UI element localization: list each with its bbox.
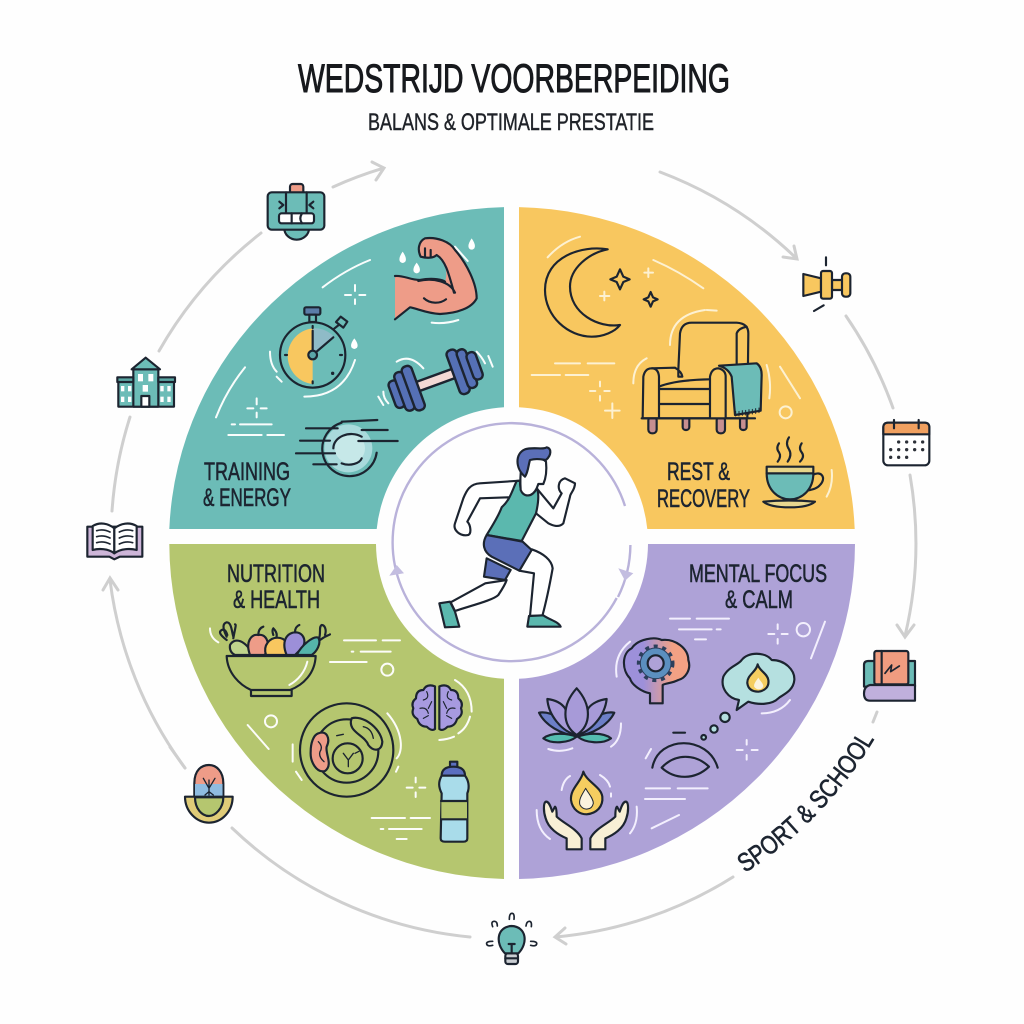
icon: stars xyxy=(610,269,658,307)
icon: healthy bowl xyxy=(185,765,233,823)
title: WEDSTRIJD VOORBERPEIDING xyxy=(298,57,730,101)
panel: rest and recovery xyxy=(519,207,855,529)
heading: nutrition xyxy=(227,560,325,614)
icon: megaphone weight xyxy=(803,257,850,311)
icon: speed ball xyxy=(296,420,398,476)
heading: training: & ENERGY xyxy=(203,484,291,512)
icon: head with gear xyxy=(624,638,689,703)
icon: light bulb xyxy=(487,913,537,964)
icon: crescent moon xyxy=(545,248,620,337)
icon: lotus flower xyxy=(539,688,614,742)
icon: dumbbell xyxy=(384,342,487,418)
icon: flexed arm xyxy=(395,238,477,319)
icon: brain xyxy=(412,685,462,730)
icon: gymnastics equipment top xyxy=(268,184,324,240)
icon: plate of food xyxy=(300,703,393,797)
heading: mental focus xyxy=(689,560,827,614)
icon: water bottle xyxy=(439,762,469,842)
heading: nutrition: NUTRITION xyxy=(227,560,325,588)
icon: armchair xyxy=(642,323,762,433)
heading: training xyxy=(203,458,291,512)
icon: stacked books xyxy=(864,651,915,701)
center circle with runner xyxy=(389,423,633,661)
subtitle: BALANS & OPTIMALE PRESTATIE xyxy=(368,109,654,136)
icon: tea cup xyxy=(763,437,823,507)
icon: hands holding flame xyxy=(544,772,628,849)
heading: nutrition: & HEALTH xyxy=(233,586,320,614)
heading: rest: REST & xyxy=(667,458,730,486)
heading: rest xyxy=(657,458,750,513)
icon: open book xyxy=(87,524,142,559)
curved label: sport and school: SPORT & SCHOOL xyxy=(738,736,874,871)
heading: rest: RECOVERY xyxy=(657,485,750,513)
outer cycle ring arrows xyxy=(103,162,916,944)
heading: mental focus: MENTAL FOCUS xyxy=(689,560,827,588)
icon: closed eye xyxy=(652,733,718,777)
icon: fruit bowl xyxy=(220,622,330,696)
panel: mental focus and calm xyxy=(519,544,855,879)
icon: thought bubble xyxy=(701,654,794,740)
panel: nutrition and health xyxy=(169,544,504,879)
heading: training: TRAINING xyxy=(204,458,290,486)
icon: school building xyxy=(117,358,175,407)
icon: calendar xyxy=(883,420,929,465)
icon: stopwatch xyxy=(280,307,358,388)
panel: training and energy xyxy=(169,207,504,529)
icon: runner xyxy=(439,447,575,627)
heading: mental focus: & CALM xyxy=(725,586,793,614)
